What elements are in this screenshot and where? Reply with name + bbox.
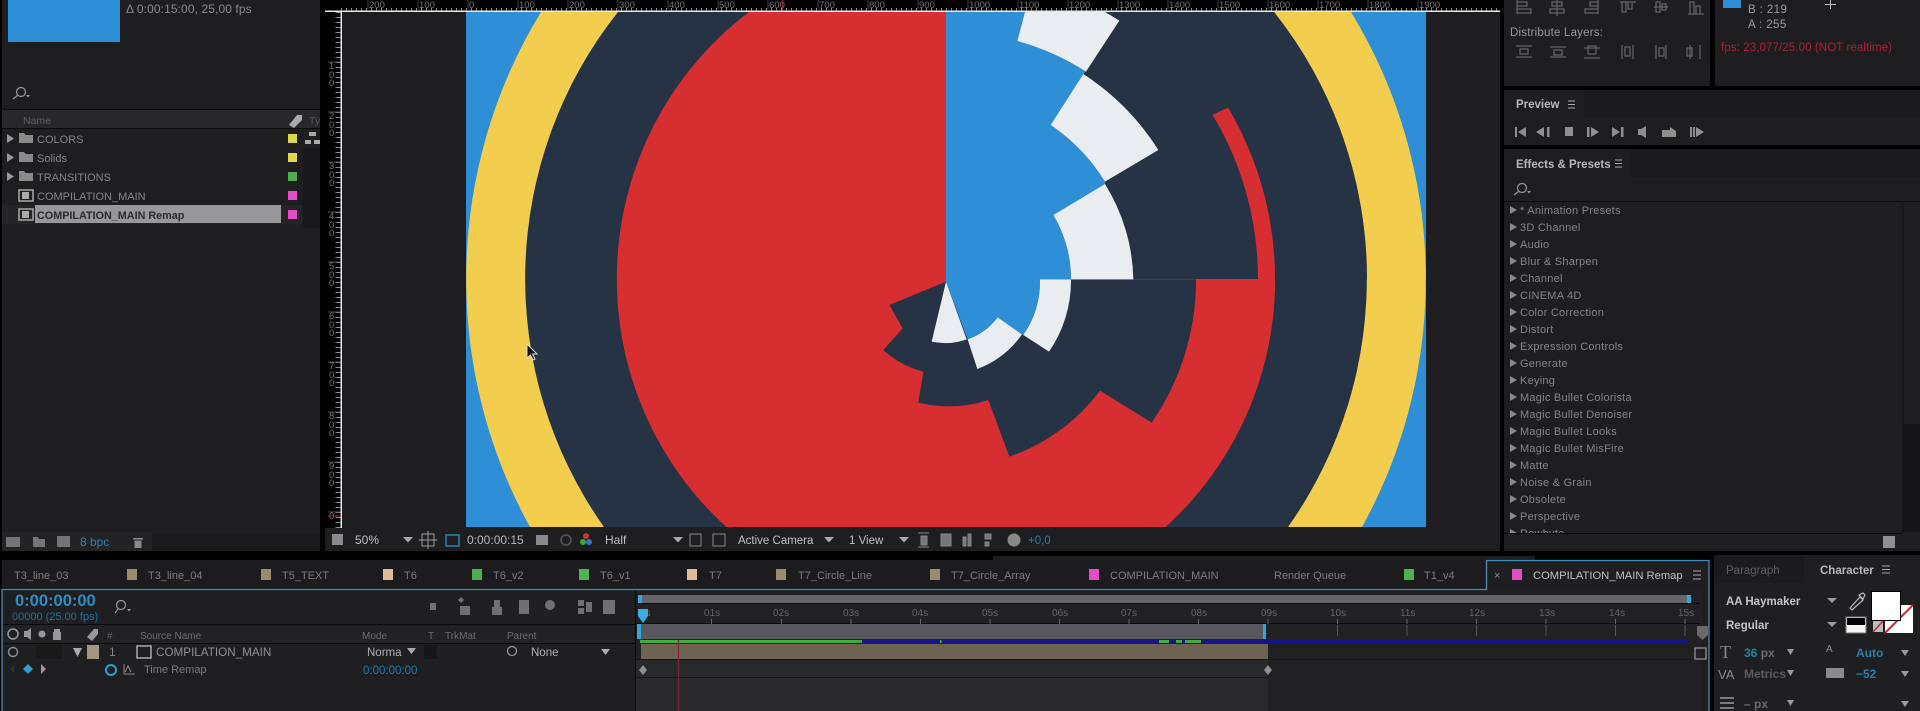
horizontal ruler: 1200 — [1069, 0, 1090, 11]
icon: tracking — [1826, 668, 1844, 678]
timeline column header: T — [428, 631, 434, 642]
vertical ruler: 0 — [329, 370, 334, 381]
render cache line — [640, 640, 1688, 643]
vertical ruler: 0 — [329, 220, 334, 231]
time ruler: 12s — [1469, 608, 1485, 619]
vertical ruler: 0 — [329, 120, 334, 131]
panel: project — [2, 0, 321, 551]
panel: timeline tabs: T6_v1 — [600, 570, 631, 582]
current time indicator — [638, 609, 648, 623]
panel: align — [1504, 0, 1710, 86]
vertical ruler: 0 — [329, 470, 334, 481]
effects list: 3D Channel — [1520, 222, 1581, 234]
active tab — [1486, 561, 1709, 590]
icon: mouse cursor — [527, 344, 537, 360]
preview title: Preview — [1516, 99, 1560, 111]
horizontal ruler: 700 — [819, 0, 835, 11]
effects list: Rowbyte — [1520, 528, 1565, 540]
horizontal ruler: 200 — [569, 0, 585, 11]
time ruler: 13s — [1539, 608, 1555, 619]
panel: timeline tabs: T5_TEXT — [282, 570, 329, 582]
project thumbnail — [8, 0, 120, 42]
fps warning: fps: 23,077/25,00 (NOT realtime) — [1721, 42, 1892, 54]
character tab: Character — [1820, 565, 1874, 577]
icon: line indent — [1720, 698, 1734, 708]
font size value: 36 px — [1744, 646, 1775, 660]
panel: timeline tabs: T7_Circle_Line — [798, 570, 872, 582]
composition artwork — [466, 12, 1426, 527]
preview transport controls — [1515, 126, 1704, 138]
paragraph tab: Paragraph — [1726, 565, 1780, 577]
horizontal ruler: 300 — [619, 0, 635, 11]
kerning value: Metrics — [1744, 667, 1786, 681]
timeline column header — [2, 624, 636, 644]
project list — [2, 132, 320, 228]
panel: info: A : 255 — [1748, 19, 1787, 31]
horizontal ruler: 400 — [669, 0, 685, 11]
layer row — [8, 645, 610, 659]
timeline column header: Source Name — [140, 631, 202, 642]
icon: crosshair — [1825, 0, 1836, 9]
time ruler: 03s — [843, 608, 859, 619]
time ruler: 06s — [1052, 608, 1068, 619]
panel: timeline tabs: COMPILATION_MAIN — [1110, 570, 1219, 582]
yellow ring — [466, 12, 1426, 527]
vertical ruler: 0 — [329, 428, 334, 439]
time ruler: 14s — [1609, 608, 1625, 619]
panel: effects and presets — [1504, 149, 1920, 551]
panel: preview — [1504, 90, 1920, 145]
effects list: Magic Bullet Denoiser — [1520, 409, 1632, 421]
effects list: Matte — [1520, 460, 1549, 472]
time remap row: Time Remap — [144, 664, 207, 676]
panel: timeline tabs: T6 — [404, 570, 417, 582]
project list: Solids — [37, 153, 67, 165]
icon: project search — [13, 88, 30, 99]
project list: COLORS — [37, 134, 83, 146]
panel: character — [1714, 555, 1920, 711]
time ruler: 04s — [912, 608, 928, 619]
project list: TRANSITIONS — [37, 172, 111, 184]
navy top-right quadrant — [946, 12, 1367, 279]
icon: eyedropper — [1850, 593, 1865, 610]
horizontal ruler: 1300 — [1119, 0, 1140, 11]
vertical ruler: 0 — [329, 270, 334, 281]
horizontal ruler: 100 — [419, 0, 435, 11]
icon: font size: T — [1720, 642, 1731, 662]
effects list: Color Correction — [1520, 307, 1604, 319]
vertical ruler: 0 — [329, 511, 334, 522]
active tab: × — [1494, 570, 1500, 582]
effects list: Blur & Sharpen — [1520, 256, 1598, 268]
timeline column header: Mode — [362, 631, 387, 642]
vertical ruler: 0 — [329, 128, 334, 139]
vertical ruler: 0 — [329, 278, 334, 289]
navy ring — [525, 12, 1367, 527]
panel: info — [1715, 0, 1920, 86]
effects list — [1510, 205, 1633, 540]
effects list: * Animation Presets — [1520, 205, 1621, 217]
red disc — [617, 12, 1275, 527]
align icons — [1517, 0, 1704, 16]
effects list: Audio — [1520, 239, 1549, 251]
horizontal ruler: 0 — [469, 0, 474, 11]
horizontal ruler: 100 — [519, 0, 535, 11]
time ruler: 02s — [773, 608, 789, 619]
time ruler: 0s — [640, 608, 651, 619]
effects list: Magic Bullet Colorista — [1520, 392, 1633, 404]
horizontal ruler: 1000 — [969, 0, 990, 11]
horizontal ruler: 1500 — [1219, 0, 1240, 11]
viewer toolbar: 0:00:00:15 — [467, 533, 524, 547]
project column header — [2, 110, 321, 128]
icon: new effect — [1883, 536, 1895, 548]
work area top bar — [640, 595, 1688, 603]
red time marker — [678, 640, 680, 711]
timeline outline — [2, 560, 1709, 711]
project list: COMPILATION_MAIN — [37, 191, 146, 203]
blue scalloped burst — [946, 12, 1105, 339]
effects list: Noise & Grain — [1520, 477, 1592, 489]
vertical ruler: 6 — [329, 311, 334, 322]
vertical ruler: 0 — [329, 178, 334, 189]
work area bar — [639, 624, 1266, 639]
project column header: Name — [23, 115, 51, 127]
white segments — [932, 12, 1158, 369]
horizontal ruler: 1600 — [1269, 0, 1290, 11]
effects list: CINEMA 4D — [1520, 290, 1582, 302]
effects list: Magic Bullet MisFire — [1520, 443, 1624, 455]
horizontal ruler: 900 — [919, 0, 935, 11]
time ruler: 05s — [982, 608, 998, 619]
zoom shield — [1697, 626, 1708, 640]
panel: timeline tabs: Render Queue — [1274, 570, 1346, 582]
icon: effects menu — [1615, 160, 1622, 167]
vertical ruler: 9 — [329, 461, 334, 472]
timeline column header: # — [107, 631, 113, 642]
distribute layers label: Distribute Layers: — [1510, 27, 1603, 39]
effects list: Perspective — [1520, 511, 1580, 523]
viewer toolbar: +0,0 — [1028, 535, 1051, 547]
time ruler — [640, 608, 1694, 624]
vertical ruler: 0 — [329, 78, 334, 89]
layer row: COMPILATION_MAIN — [156, 646, 271, 659]
frame count: 00000 (25.00 fps) — [12, 611, 98, 623]
vertical ruler: 0 — [329, 170, 334, 181]
vertical ruler: 1 — [329, 61, 334, 72]
panel: timeline tabs — [2, 560, 1709, 590]
horizontal ruler: 600 — [769, 0, 785, 11]
vertical ruler: 4 — [329, 211, 334, 222]
time ruler: 15s — [1678, 608, 1694, 619]
thin red arc — [1213, 108, 1275, 279]
timeline column header: TrkMat — [445, 631, 476, 642]
effects list: Keying — [1520, 375, 1555, 387]
project footer — [2, 532, 320, 551]
icon: timeline search — [115, 600, 131, 613]
timeline graph area — [636, 590, 1708, 711]
icon: effects search — [1514, 184, 1531, 195]
icon: kerning: VA — [1718, 667, 1735, 682]
horizontal ruler: 1400 — [1169, 0, 1190, 11]
icon: character menu — [1882, 566, 1890, 573]
dropdown arrows — [1787, 598, 1909, 707]
time ruler: 01s — [704, 608, 720, 619]
vertical ruler: 0 — [329, 70, 334, 81]
layer row: Norma — [367, 647, 402, 659]
effects list: Distort — [1520, 324, 1554, 336]
timeline switch icons — [424, 597, 615, 615]
horizontal ruler: 1900 — [1419, 0, 1440, 11]
track backgrounds — [636, 660, 1268, 711]
color swatches — [1846, 591, 1913, 633]
effects list: Expression Controls — [1520, 341, 1623, 353]
horizontal ruler: 500 — [719, 0, 735, 11]
font style: Regular — [1726, 620, 1769, 632]
font name: AA Haymaker — [1726, 596, 1801, 608]
panel: timeline tabs: T1_v4 — [1424, 570, 1455, 582]
vertical ruler: 0 — [329, 420, 334, 431]
horizontal ruler — [325, 0, 1500, 12]
time remap row: 0:00:00:00 — [363, 665, 417, 677]
keyframes — [639, 665, 1272, 675]
vertical ruler: 0 — [329, 378, 334, 389]
effects list: Channel — [1520, 273, 1563, 285]
time remap row — [10, 664, 417, 677]
time ruler: 07s — [1121, 608, 1137, 619]
decorative strip — [993, 556, 1535, 560]
tracking value: −52 — [1856, 667, 1877, 681]
vertical ruler: 5 — [329, 261, 334, 272]
effects list: Magic Bullet Looks — [1520, 426, 1617, 438]
effects title: Effects & Presets — [1516, 159, 1611, 171]
active tab: COMPILATION_MAIN Remap — [1533, 570, 1683, 582]
layer row: 1 — [109, 645, 116, 659]
effects list: Obsolete — [1520, 494, 1566, 506]
vertical ruler: 3 — [329, 161, 334, 172]
time ruler: 11s — [1400, 608, 1415, 619]
navy scalloped burst — [883, 279, 1196, 457]
time ruler: 09s — [1261, 608, 1277, 619]
comp duration text: Δ 0:00:15:00, 25,00 fps — [126, 2, 252, 16]
vertical ruler — [325, 12, 342, 528]
horizontal ruler: 200 — [369, 0, 385, 11]
icon: render toggle — [1695, 648, 1706, 659]
panel: composition viewer — [325, 0, 1500, 551]
vertical ruler: 0 — [329, 228, 334, 239]
project footer: 8 bpc — [80, 535, 109, 549]
vertical ruler: 2 — [329, 111, 334, 122]
timecode: 0:00:00:00 — [15, 592, 96, 610]
horizontal ruler: 800 — [869, 0, 885, 11]
viewer toolbar: Half — [605, 533, 627, 547]
distribute icons — [1516, 45, 1700, 59]
color values: B : 219 — [1748, 4, 1787, 16]
time ruler: 10s — [1330, 608, 1346, 619]
vertical ruler: 0 — [329, 328, 334, 339]
horizontal ruler: 1700 — [1319, 0, 1340, 11]
icon: preview menu — [1568, 101, 1575, 108]
project list: COMPILATION_MAIN Remap — [37, 210, 185, 222]
vertical ruler: 7 — [329, 361, 334, 372]
panel: timeline tabs: T3_line_04 — [148, 570, 202, 582]
panel: timeline — [2, 560, 1709, 711]
time ruler: 08s — [1191, 608, 1207, 619]
effects list: Generate — [1520, 358, 1568, 370]
vertical ruler: 0 — [329, 478, 334, 489]
layer row: None — [531, 647, 558, 659]
horizontal ruler: 1100 — [1019, 0, 1039, 11]
leading value: Auto — [1856, 646, 1883, 660]
vertical ruler: 0 — [329, 320, 334, 331]
viewer toolbar: 50% — [355, 533, 379, 547]
viewer toolbar: 1 View — [849, 535, 884, 547]
layer bar — [641, 644, 1268, 659]
icon: leading: A — [1826, 644, 1833, 655]
vertical ruler: 8 — [329, 411, 334, 422]
panel: timeline tabs: T6_v2 — [493, 570, 524, 582]
panel: timeline tabs: T3_line_03 — [14, 570, 68, 582]
color swatch — [1723, 0, 1741, 8]
panel: timeline tabs: T7_Circle_Array — [951, 570, 1031, 582]
timeline column header: Parent — [507, 631, 537, 642]
project column header: Ty — [309, 115, 321, 127]
radial burst shapes — [883, 12, 1196, 457]
viewer toolbar: Active Camera — [738, 535, 814, 547]
stroke value: – px — [1744, 697, 1768, 711]
panel: timeline tabs: T7 — [709, 570, 722, 582]
horizontal ruler: 1800 — [1369, 0, 1390, 11]
viewer toolbar — [332, 531, 1051, 549]
